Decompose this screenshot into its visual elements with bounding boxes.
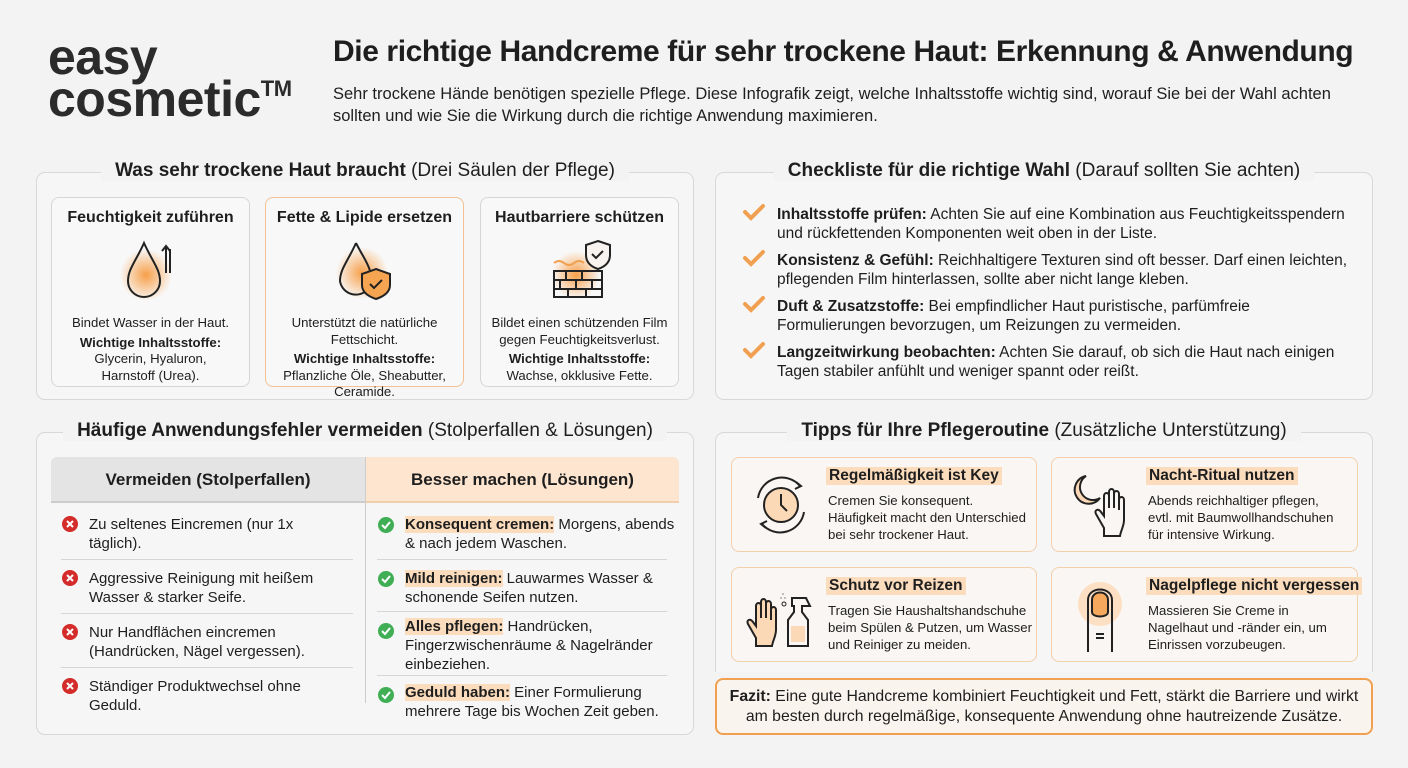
card: Fette: Pflanzliche Öle, Sheabutter, xyxy=(283,368,446,382)
card: Barriere: Bildet einen schützenden Film xyxy=(492,315,667,330)
icon: drop shield xyxy=(337,242,391,300)
icons: green checks xyxy=(378,517,394,703)
tip: Nacht-Ritual: Abends reichhaltiger pflegen, xyxy=(1148,493,1319,508)
card: Feuchtigkeit xyxy=(51,197,250,387)
tip: Nacht-Ritual xyxy=(1051,457,1358,552)
card: Feuchtigkeit: Wichtige Inhaltsstoffe: xyxy=(80,334,221,350)
checklist items: Konsistenz & Gefühl: Reichhaltigere Texturen sind oft besser. Darf einen leichten, xyxy=(777,252,1347,269)
column: solutions: & nach jedem Waschen. xyxy=(405,535,567,552)
heading: Was sehr trockene Haut braucht: Was sehr trockene Haut braucht (Drei Säulen der Pflege) xyxy=(115,160,615,181)
table header left: Vermeiden (Stolperfallen) xyxy=(106,470,310,489)
column: solutions: Geduld haben: Einer Formulierung xyxy=(405,684,642,701)
tip: Regelmäßigkeit: Cremen Sie konsequent. xyxy=(828,493,973,508)
column: mistakes: Geduld. xyxy=(89,697,142,714)
tip: Schutz vor Reizen: beim Spülen & Putzen, um Wasser xyxy=(828,620,1032,635)
panel: drei Säulen: Ceramide. xyxy=(334,384,395,399)
tip: Regelmäßigkeit: Regelmäßigkeit ist Key xyxy=(829,467,999,484)
tip: Schutz vor Reizen: Schutz vor Reizen xyxy=(829,577,962,594)
tip: Nagelpflege: Einrissen vorzubeugen. xyxy=(1148,637,1286,652)
card: Fette: Fettschicht. xyxy=(331,332,398,346)
tip: Regelmäßigkeit: Häufigkeit macht den Unterschied xyxy=(828,510,1026,525)
checklist items: Inhaltsstoffe prüfen: Achten Sie auf eine Kombination aus Feuchtigkeitsspendern xyxy=(777,206,1345,223)
tip: Schutz vor Reizen: Tragen Sie Haushaltshandschuhe xyxy=(828,603,1026,618)
column: solutions: Alles pflegen: Handrücken, xyxy=(405,618,593,635)
checklist items: Tagen stabiler anfühlt und weniger spannt oder reißt. xyxy=(777,363,1139,380)
card: Barriere: gegen Feuchtigkeitsverlust. xyxy=(499,332,660,346)
card: Barriere: Hautbarriere schützen xyxy=(495,209,664,226)
column: solutions: einbeziehen. xyxy=(405,656,490,673)
callout: Fazit: Fazit: Eine gute Handcreme kombiniert Feuchtigkeit und Fett, stärkt die Barriere und wirkt xyxy=(730,688,1358,705)
table header right xyxy=(365,457,679,503)
subtitle xyxy=(333,85,1331,125)
card: Feuchtigkeit: Glycerin, Hyaluron, xyxy=(94,351,207,366)
heading: Checkliste: Checkliste für die richtige Wahl (Darauf sollten Sie achten) xyxy=(788,160,1300,181)
tip: Nacht-Ritual: evtl. mit Baumwollhandschuhen xyxy=(1148,510,1333,525)
card: Fette xyxy=(265,197,464,387)
tip: Regelmäßigkeit xyxy=(731,457,1037,552)
panel: drei Säulen xyxy=(36,172,694,400)
column: mistakes xyxy=(62,516,313,714)
callout: Fazit xyxy=(715,678,1373,735)
column: solutions: mehrere Tage bis Wochen Zeit geben. xyxy=(405,703,659,720)
checklist items: Duft & Zusatzstoffe: Bei empfindlicher Haut puristische, parfümfreie xyxy=(777,298,1250,315)
column: solutions: Mild reinigen: Lauwarmes Wasser & xyxy=(405,570,653,587)
logo: cosmeticTM xyxy=(48,71,292,127)
tip: Nagelpflege xyxy=(1051,567,1358,662)
checklist items: und rückfettenden Komponenten weit oben in der Liste. xyxy=(777,225,1157,242)
tip: Nacht-Ritual: Nacht-Ritual nutzen xyxy=(1149,467,1295,484)
tip: Nagelpflege: Nagelpflege nicht vergessen xyxy=(1149,577,1359,594)
heading: Häufige Anwendungsfehler: Häufige Anwendungsfehler vermeiden (Stolperfallen & Lösungen) xyxy=(77,420,653,441)
logo xyxy=(48,29,292,127)
table header right: Besser machen (Lösungen) xyxy=(411,470,634,489)
icon: moon hand xyxy=(1074,475,1125,537)
table header left xyxy=(51,457,365,503)
icons: check marks xyxy=(742,204,766,359)
card: Fette: Fette & Lipide ersetzen xyxy=(277,209,452,226)
tip: Regelmäßigkeit: bei sehr trockener Haut. xyxy=(828,527,969,542)
card: Barriere: Wichtige Inhaltsstoffe: xyxy=(509,351,650,366)
card: Fette: Unterstützt die natürliche xyxy=(292,315,437,330)
icon: drop arrow xyxy=(121,240,171,300)
icon: hand spray xyxy=(746,594,812,647)
callout: Fazit: am besten durch regelmäßige, konsequente Anwendung ohne hautreizende Zusätze. xyxy=(746,708,1342,725)
column: mistakes: Zu seltenes Eincremen (nur 1x xyxy=(89,516,293,533)
card: Barriere xyxy=(480,197,679,387)
column: mistakes: Wasser & starker Seife. xyxy=(89,589,246,606)
icons: red x xyxy=(62,516,78,694)
column: solutions xyxy=(378,516,674,720)
panel: Anwendungsfehler xyxy=(36,432,694,735)
card: Feuchtigkeit: Harnstoff (Urea). xyxy=(102,368,199,382)
checklist items: Formulierungen bevorzugen, um Reizungen zu vermeiden. xyxy=(777,317,1181,334)
panel: Tipps xyxy=(715,432,1373,672)
icon: finger nail xyxy=(1078,582,1122,652)
icon: wall shield xyxy=(553,240,611,298)
column: mistakes: täglich). xyxy=(89,535,142,552)
tip: Nacht-Ritual: für intensive Wirkung. xyxy=(1148,527,1275,542)
checklist items xyxy=(742,204,1347,380)
logo: easy xyxy=(48,29,157,85)
card: Fette: Wichtige Inhaltsstoffe: xyxy=(294,351,435,366)
checklist items: Langzeitwirkung beobachten: Achten Sie darauf, ob sich die Haut nach einigen xyxy=(777,344,1334,361)
tip: Schutz vor Reizen xyxy=(731,567,1037,662)
tip: Nagelpflege: Massieren Sie Creme in xyxy=(1148,603,1289,618)
panel: Checkliste xyxy=(715,172,1373,400)
card: Barriere: Wachse, okklusive Fette. xyxy=(506,368,653,382)
tip: Nagelpflege: Nagelhaut und -ränder ein, um xyxy=(1148,620,1327,635)
tip: Schutz vor Reizen: und Reiniger zu meiden. xyxy=(828,637,971,652)
checklist items: pflegenden Film hinterlassen, sollte aber nicht lange kleben. xyxy=(777,271,1189,288)
column: mistakes: Ständiger Produktwechsel ohne xyxy=(89,678,301,695)
column: mistakes: Nur Handflächen eincremen xyxy=(89,624,276,641)
subtitle: sollten und wie Sie die Wirkung durch die richtige Anwendung maximieren. xyxy=(333,107,878,125)
column: solutions: Konsequent cremen: Morgens, abends xyxy=(405,516,674,533)
column: solutions: schonende Seifen nutzen. xyxy=(405,589,578,606)
card: Feuchtigkeit: Bindet Wasser in der Haut. xyxy=(72,315,229,330)
subtitle: Sehr trockene Hände benötigen spezielle Pflege. Diese Infografik zeigt, welche Inhaltsstoffe wichtig sind, worauf Sie bei der Wahl achten xyxy=(333,85,1331,103)
column: mistakes: (Handrücken, Nägel vergessen). xyxy=(89,643,305,660)
icon: clock xyxy=(757,476,805,534)
card: Feuchtigkeit: Feuchtigkeit zuführen xyxy=(67,209,234,226)
title: Die richtige Handcreme für sehr trockene Haut: Erkennung & Anwendung xyxy=(333,35,1353,68)
column: solutions: Fingerzwischenräume & Nagelränder xyxy=(405,637,653,654)
column: mistakes: Aggressive Reinigung mit heißem xyxy=(89,570,313,587)
heading: Tipps: Tipps für Ihre Pflegeroutine (Zusätzliche Unterstützung) xyxy=(801,420,1287,441)
